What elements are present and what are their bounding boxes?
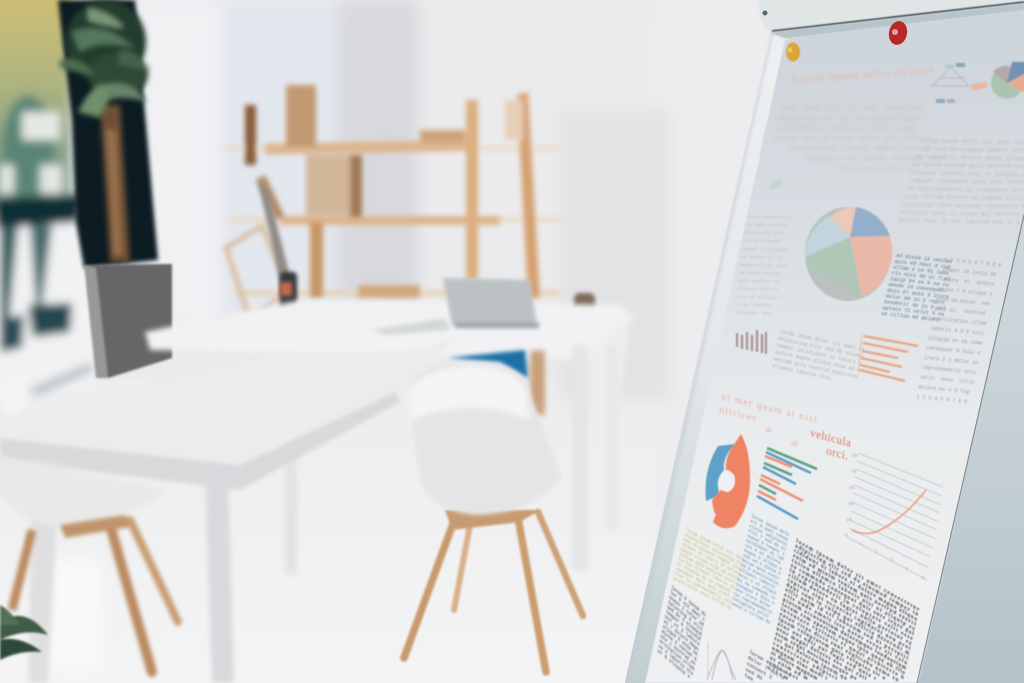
main dark text block: ullam xyxy=(767,665,789,682)
dense blue-grey text grid: duis 27 aute 3 irure xyxy=(886,288,949,301)
faint right text block: proident sunt in culpa qui officia d xyxy=(901,209,1024,218)
large pie chart xyxy=(805,207,892,301)
aluminium frame xyxy=(626,33,790,683)
lower middle faint text xyxy=(772,329,864,380)
grey text block bottom centre: lorem 4 ipsum d xyxy=(749,649,792,679)
faint intro text block: lorem ipsum dolor sit amet consectetur xyxy=(778,105,926,112)
palm leaves xyxy=(60,0,150,118)
grey text block bottom centre: tem xyxy=(744,672,754,683)
blue text block: eniam quis nostr xyxy=(741,558,780,582)
faint intro text block: aliquip ex ea commodo consequat duis xyxy=(805,155,946,162)
grey text block lower left: lorem 3 ipsum do xyxy=(671,584,706,619)
blue text block: usmod 3 tempor i xyxy=(747,534,785,558)
axis labels: 5 xyxy=(922,575,925,581)
right grey-rose table text: labore et dolore xyxy=(940,277,995,288)
grey text block lower left: unt ut 2 labore xyxy=(664,613,700,648)
dense blue-grey text grid: iquip 84 ex 5 ea co xyxy=(889,276,949,289)
faint right text block xyxy=(899,137,1024,226)
right grey-rose table text: 1 2 3 4 5 6 7 8 9 0 xyxy=(944,257,1002,269)
main dark text block: ea commodo consequat duis aute irure dol xyxy=(790,562,915,638)
small bar chart xyxy=(737,330,766,354)
grey text block lower left: lor 8 sit amet c xyxy=(669,589,705,624)
blue chair behind table xyxy=(448,350,528,378)
axis labels: 2 xyxy=(875,549,878,555)
main dark text block: ptatem accusantium doloremque laudantium xyxy=(782,596,907,672)
main dark text block: ntur magni dolores eos qui rati xyxy=(776,626,867,682)
dense blue-grey text grid: se cillum 88 dolore xyxy=(880,311,940,324)
lower middle faint text: lorem ipsum dolor sit amet co xyxy=(779,329,865,353)
dense blue-grey text grid xyxy=(881,253,952,322)
dense blue-grey text grid: ad minim 12 veniam xyxy=(895,253,952,265)
left faint text block: nisi ut aliquip xyxy=(736,294,778,301)
grey text block bottom centre: dolor 7 sit a xyxy=(747,655,785,682)
blue text block xyxy=(732,514,790,626)
right grey-rose table text: reprehenderit volu xyxy=(922,365,977,376)
left faint text block: ut labore et do xyxy=(740,254,783,261)
left chair with wooden legs xyxy=(0,455,178,672)
blue text block: ore 9 et dolore xyxy=(745,543,781,566)
left faint text block: ullamco laboris xyxy=(737,286,779,293)
small top-right pie chart xyxy=(932,62,1024,103)
yellow text block: onsequat duis aute irure d xyxy=(675,567,735,602)
main dark text block: tation ullamco laboris nisi ut aliquip ex xyxy=(791,557,916,633)
axis labels: 50 xyxy=(849,485,855,491)
grey text block lower left: ipiscing 6 elit xyxy=(667,599,703,633)
yellow text block: ptate velit esse cillum do xyxy=(673,576,732,612)
right grey-rose table text: consequat 9 duis a xyxy=(926,345,981,356)
red chart heading: at xyxy=(765,423,773,435)
left faint text block: consequat duis xyxy=(734,310,773,317)
lower middle faint text: ullamco laboris nisi xyxy=(772,363,832,382)
donut chart xyxy=(706,434,750,528)
axis labels xyxy=(845,453,925,581)
concrete planter xyxy=(84,264,172,378)
left faint text block: tempor incididunt xyxy=(741,246,789,253)
right grey-rose table text: velit esse cillu xyxy=(920,375,975,386)
left faint text block: quis nostrud ex xyxy=(738,278,780,285)
red chart heading: vehicula xyxy=(810,427,852,450)
yellow text block: olor in reprehenderit volu xyxy=(674,571,734,607)
blue text block: nim ad 5 minim v xyxy=(742,553,781,577)
right grey-rose table text: 1 2 3 4 5 6 7 8 9 xyxy=(916,394,968,405)
blue text block: esse 2 cillum do xyxy=(732,602,771,626)
axis labels: 3 xyxy=(890,557,893,563)
dense blue-grey text grid: dolor 66 in 2 repre xyxy=(885,294,945,306)
front table xyxy=(0,335,462,683)
grey text block lower left: tempor 9 incidid xyxy=(665,608,701,643)
axis labels: 1 xyxy=(860,541,863,547)
back table xyxy=(145,300,635,575)
table legs xyxy=(28,460,234,683)
left faint text block xyxy=(735,216,788,314)
main dark text block: ollit anim id est laborum sed ut perspici xyxy=(785,587,909,662)
top heading: Lorem ipsum dolor sit amet xyxy=(791,64,935,86)
faint intro text block: aliqua enim ad minim veniam quis nostrud xyxy=(775,135,931,142)
grey text block lower left: minim 3 veniam q xyxy=(661,628,697,663)
main dark text block: lorem ipsum dolor sit amet consectetur xyxy=(796,538,920,613)
paper sheet xyxy=(645,12,1024,683)
blue text block: ute irure dolor xyxy=(735,587,772,610)
red magnet xyxy=(887,19,909,47)
yellow text block: consectetur adipiscing eli xyxy=(684,533,744,568)
axis labels: 4 xyxy=(905,566,908,572)
right grey-rose table text: tempor 34 incid 56 xyxy=(942,267,997,278)
axis labels: 0 xyxy=(845,533,848,539)
lower middle faint text: tempor incididunt ut labore e xyxy=(776,343,862,367)
main dark text block: atur aut odit aut fugit sed quia c xyxy=(777,621,877,682)
horizontal multi-colour bars xyxy=(757,448,817,519)
right grey-rose table text: aliquip ex ea comm xyxy=(928,335,983,347)
red chart heading: orci. xyxy=(826,445,849,463)
left faint text block: ad minim veniam xyxy=(739,270,781,277)
paper contents xyxy=(657,62,1024,683)
main dark text block: cepteur sint occaecat cupidatat non proi xyxy=(787,577,911,652)
lower middle faint text: veniam quis nostrud exercitat xyxy=(773,356,859,381)
red chart heading: at xyxy=(791,437,799,449)
right grey-rose table text: dolore eu 4 5 fug xyxy=(918,384,970,395)
yellow magnet xyxy=(786,42,800,62)
yellow text block: magna aliqua enim ad minim xyxy=(680,547,740,583)
faint intro text block: aute irure dolor in xyxy=(840,165,914,172)
wooden shelving unit xyxy=(218,85,563,327)
sill object at left edge xyxy=(0,375,26,415)
dense blue-grey text grid: uptate 71 velit 5 es xyxy=(882,305,945,318)
axis labels: 30 xyxy=(848,501,854,507)
main dark text block: totam rem aperiam eaque ipsa quae ab illo xyxy=(781,601,906,676)
main dark text block: ut enim ad m xyxy=(769,655,808,682)
line chart with curve xyxy=(845,453,943,581)
yellow text block: didunt ut labore et dolore xyxy=(682,542,741,578)
faint intro text block: exercitation ullamco laboris nisi ut xyxy=(790,145,931,152)
yellow text block: lorem ipsum dolor sit amet xyxy=(685,528,745,563)
faint intro text block: incididunt ut labore et dolore magna xyxy=(776,125,917,132)
blue text block: sit 4 amet conse xyxy=(750,519,789,543)
axis labels: 10 xyxy=(846,517,852,523)
main dark text block: inventore veritatis et quasi architecto b xyxy=(780,606,904,681)
left faint text block: sit amet consect xyxy=(744,222,789,229)
blue text block: nisi 1 ut aliqui xyxy=(738,573,777,597)
foreground plant at bottom left xyxy=(0,605,48,660)
faint intro text block: adipiscing elit sed do eiusmod tempor xyxy=(777,115,921,122)
grey text block lower left xyxy=(657,584,706,680)
red chart heading: ut mer quam at nisi xyxy=(721,392,819,426)
tiny icon near pie xyxy=(768,178,782,190)
blue text block: in reprehenderit xyxy=(734,592,773,617)
dark column xyxy=(58,0,158,268)
main dark text block: eatae vitae dicta sunt explicabo nemo en xyxy=(779,611,899,683)
right grey-rose table text: irure 2 3 dolor in xyxy=(924,355,979,366)
faint intro text block xyxy=(780,106,933,170)
yellow text block xyxy=(673,528,745,612)
main dark text block: cididunt ut labore et dolore magna aliqua xyxy=(793,548,918,623)
grey text block lower left: ercitation ullam xyxy=(659,638,695,673)
yellow text block: sed do eiusmod tempor inci xyxy=(683,538,743,573)
grey text block lower left: sed do 4 eiusmod xyxy=(666,604,702,638)
blue text block: elit 7 sed do ei xyxy=(748,529,787,553)
blue text block: ullamco laboris xyxy=(739,568,776,591)
growth curve xyxy=(852,490,926,534)
main dark text block: enim ad minim veniam quis nostrud exerci xyxy=(792,553,917,628)
flip chart board xyxy=(625,0,1024,683)
desk items: bottle, laptop, mug xyxy=(258,180,595,328)
right grey-rose table text: magna 7 8 aliqua 1 xyxy=(938,286,993,298)
right grey-rose table text: enim ad minim ven xyxy=(936,296,991,307)
yellow text block: veniam quis nostrud exerci xyxy=(679,552,739,588)
blue text block: magna 2 aliqua e xyxy=(743,548,782,573)
main dark text block: et dolore magnam xyxy=(770,650,818,682)
blue text block: ncididunt ut lab xyxy=(746,538,784,563)
grey text block lower left: aliqua 5 enim ad xyxy=(662,623,698,658)
blue text block: lorem ipsum dolo xyxy=(751,514,790,538)
chair shell xyxy=(408,362,562,515)
orange horizontal bars in box xyxy=(858,333,918,381)
small curve chart at bottom xyxy=(707,642,736,680)
right grey-rose table text: exercitation ullam xyxy=(932,316,987,327)
dense blue-grey text grid: mmodo 19 consequat xyxy=(888,282,945,294)
left faint text block: ex ea commodo xyxy=(735,302,771,309)
grey text block lower left: ut 8 aliquip e xyxy=(657,648,690,680)
yellow text block: ut aliquip ex ea commodo c xyxy=(677,562,736,597)
grey text block lower left: uis 1 nostrud ex xyxy=(660,633,696,668)
lower middle faint text: dolore magna aliqua enim ad m xyxy=(774,350,861,374)
grey text block bottom centre: sed do xyxy=(745,667,763,682)
main dark text block: umquam eius modi t xyxy=(771,645,828,682)
dense blue-grey text grid: ullam 3 co 91 labo xyxy=(892,265,949,277)
main dark text block xyxy=(767,538,920,683)
blue text block: ex ea commodo co xyxy=(737,578,776,602)
board backing xyxy=(625,0,1024,683)
left faint text block: adipiscing elit xyxy=(743,230,786,237)
grey text block lower left: co 4 laboris nis xyxy=(658,643,694,677)
grey text block bottom centre: consect 2 xyxy=(746,661,772,681)
main dark text block: in reprehenderit in voluptate velit esse xyxy=(789,567,914,642)
yellow text block: tation ullamco laboris nis xyxy=(678,557,737,592)
left faint text block: lorem ipsum dolor xyxy=(745,214,793,221)
grey text block lower left: onsec 1 tetur ad xyxy=(668,594,704,628)
main dark text block: atem sequi nesciunt neque po xyxy=(775,631,857,682)
left faint text block: magna aliqua enim xyxy=(740,262,787,269)
main dark text block: quis nost xyxy=(768,660,798,682)
dense blue-grey text grid: quis 45 nost 8 rud xyxy=(894,259,951,271)
main dark text block: cillum dolore eu fugiat nulla pariatur ex xyxy=(788,572,912,647)
faint right text block: mollit anim id est laborum sed ut p xyxy=(899,217,1021,226)
dense blue-grey text grid: henderit 40 in 9 vol xyxy=(883,300,946,312)
right grey-rose table text xyxy=(916,257,1002,406)
grey text block lower left: et 7 dolore magn xyxy=(663,618,699,653)
laptop xyxy=(372,278,539,335)
top clamp bar xyxy=(758,0,1024,38)
blue text block: nsequat 6 duis a xyxy=(736,582,775,607)
red chart heading: ultrices xyxy=(719,405,758,424)
chart grid xyxy=(847,453,943,580)
white chair with wooden legs xyxy=(404,362,583,672)
right grey-rose table text: quis 12 nostrud xyxy=(934,306,986,317)
main dark text block: atis unde omnis iste natus error sit volu xyxy=(784,592,908,667)
main dark text block: ipsam voluptatem quia voluptas sit a xyxy=(778,616,886,682)
blue text block: ud 8 exercitatio xyxy=(740,563,779,587)
blue text block: ctetur adipiscin xyxy=(749,524,788,548)
main dark text block: est qui dolorem ipsum qu xyxy=(774,635,847,682)
main dark text block: adipiscing elit sed do eiusmod tempor in xyxy=(795,543,919,618)
potted palm plant xyxy=(60,0,172,378)
dense blue-grey text grid: ris nisi 62 ut 7 al xyxy=(891,270,951,283)
main dark text block: consectetur adipisci xyxy=(773,640,838,682)
lower middle faint text: adipiscing elit sed do eiusmo xyxy=(777,336,864,360)
window with outdoor greenery xyxy=(0,0,95,396)
main dark text block: dent sunt in culpa qui officia deserunt m xyxy=(786,582,910,657)
axis labels: 90 xyxy=(852,453,858,459)
left faint text block: sed do eiusmod xyxy=(742,238,782,245)
blue text block: voluptate velit xyxy=(733,597,770,620)
right grey-rose table text: laboris 4 5 6 nisi xyxy=(930,326,985,337)
axis labels: 70 xyxy=(851,469,857,475)
red chart heading xyxy=(719,392,852,463)
